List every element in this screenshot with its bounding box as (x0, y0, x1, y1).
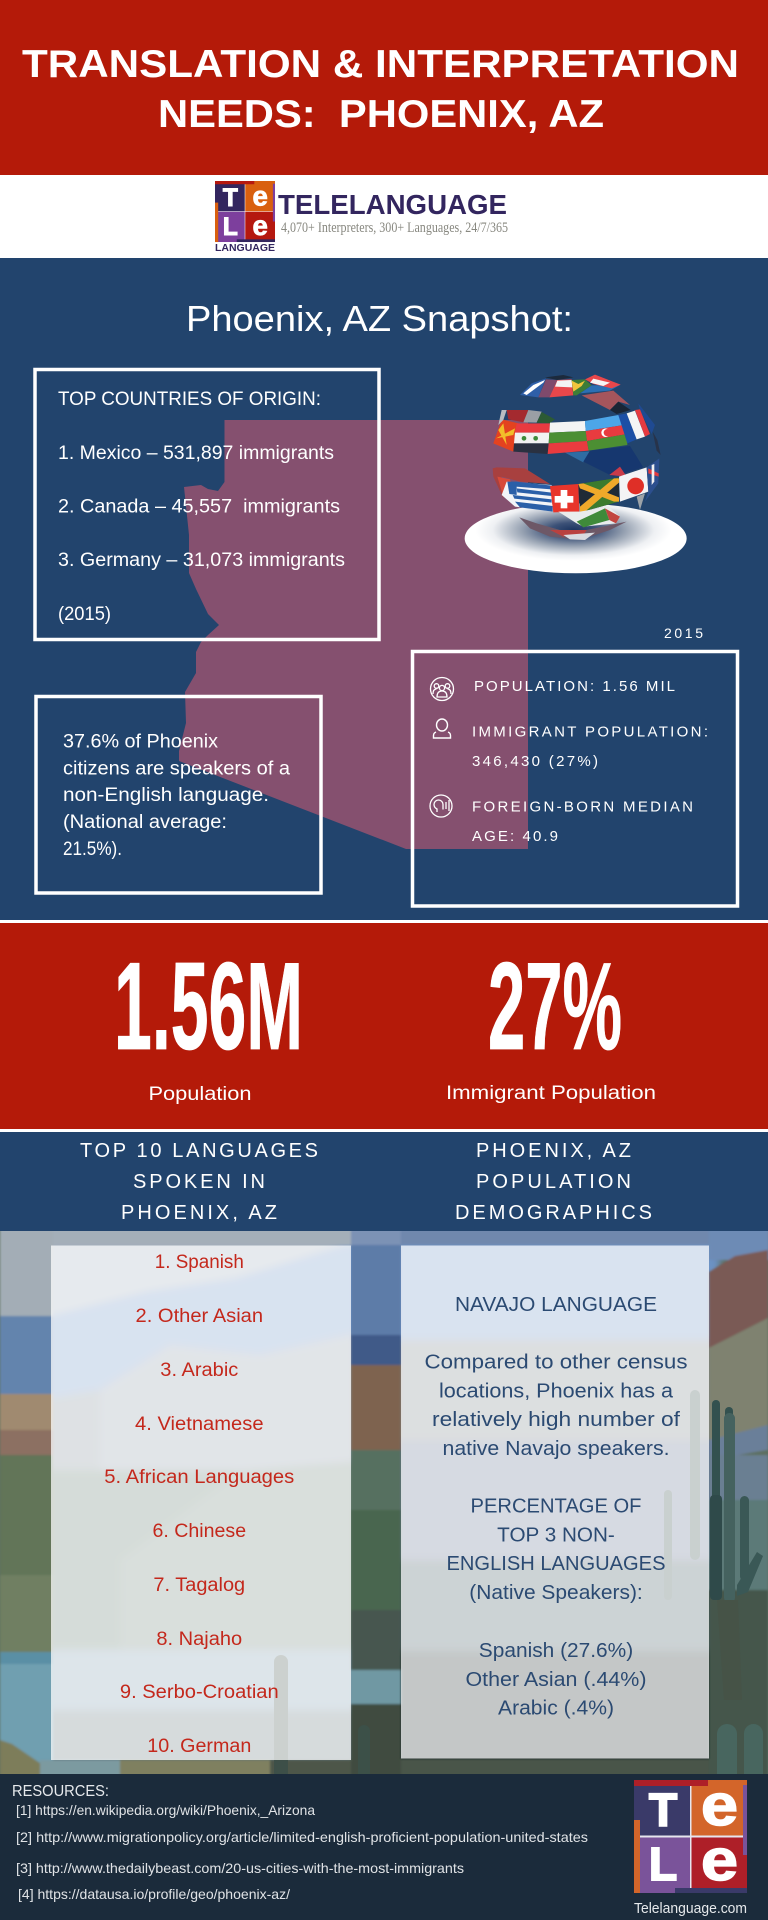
panel: top 10 languages list: 7. Tagalog (153, 1575, 245, 1596)
header band (0, 0, 768, 175)
panel: demographics text: native Navajo speakers. (442, 1438, 670, 1460)
heading: snapshot: Phoenix, AZ Snapshot: (186, 298, 573, 339)
icon: telelanguage logo large: T (649, 1784, 677, 1836)
stat: population (114, 938, 303, 1105)
panel: top countries: (2015) (58, 604, 111, 625)
panel: top countries (35, 370, 379, 640)
panel: top 10 languages list (51, 1246, 351, 1760)
icon: telelanguage logo large: L (649, 1838, 677, 1890)
panel: population stats: FOREIGN-BORN MEDIAN (472, 798, 693, 816)
panel: population stats: AGE: 40.9 (472, 828, 558, 845)
panel: non-english speakers (36, 696, 321, 893)
icon: telelanguage logo small (215, 180, 275, 242)
heading: demographics: POPULATION (476, 1171, 631, 1193)
panel: demographics text: TOP 3 NON- (497, 1524, 615, 1546)
right strip (709, 1231, 768, 1262)
map: arizona (179, 420, 528, 849)
panel: top 10 languages list: 5. African Languages (104, 1467, 294, 1488)
panel: top 10 languages list: 6. Chinese (152, 1521, 246, 1542)
under left panel (52, 1244, 351, 1316)
stat: immigrant population (446, 938, 656, 1104)
text: resource links: [2] http://www.migrationpolicy.org/article/limited-english-proficient-population-united-states (16, 1829, 588, 1845)
panel: top 10 languages list: 2. Other Asian (136, 1306, 263, 1327)
panel: non-english speakers: citizens are speakers of a (63, 758, 290, 780)
text: resource links: [1] https://en.wikipedia.org/wiki/Phoenix,_Arizona (16, 1802, 315, 1818)
heading: top 10 languages (80, 1140, 318, 1224)
panel: top 10 languages list: 3. Arabic (160, 1360, 238, 1381)
panel: non-english speakers: non-English language. (63, 785, 269, 806)
panel: top countries: 3. Germany – 31,073 immigrants (58, 550, 345, 571)
panel: big stats (0, 920, 768, 1132)
stat: population: 1.56M (114, 938, 303, 1076)
panel: top 10 languages list: 10. German (147, 1736, 251, 1757)
panel: snapshot (0, 258, 768, 920)
panel: top 10 languages list: 9. Serbo-Croatian (120, 1682, 279, 1703)
photo: desert mountains and lake background (0, 1220, 768, 1784)
gap strip (350, 1225, 402, 1245)
icon: telelanguage logo large: e (701, 1828, 738, 1893)
icon: telelanguage logo small: L (223, 214, 238, 241)
stat: immigrant population: Immigrant Population (446, 1083, 656, 1104)
icon: telelanguage logo small: e (252, 210, 268, 241)
icon: cacti (274, 1390, 763, 1784)
panel: demographics text (401, 1246, 709, 1758)
title (22, 43, 739, 136)
under right panel (400, 1244, 724, 1344)
panel: top countries: 2. Canada – 45,557 immigrants (58, 496, 340, 518)
logo tagline: 4,070+ Interpreters, 300+ Languages, 24/7/365 (281, 220, 508, 236)
text: resource links (16, 1802, 588, 1902)
title: NEEDS: PHOENIX, AZ (158, 93, 604, 136)
panel: top 10 languages list: 8. Najaho (156, 1629, 242, 1650)
icon: telelanguage logo large: e (701, 1773, 738, 1838)
panel: section headings (0, 1132, 768, 1231)
panel: population stats: IMMIGRANT POPULATION: (472, 724, 708, 740)
logo caption: LANGUAGE (215, 242, 275, 254)
panel: population stats: 346,430 (27%) (472, 753, 598, 770)
text: year: 2015 (664, 625, 703, 641)
logo wordmark: TELELANGUAGE (278, 189, 507, 220)
logo band (0, 175, 768, 258)
stat: population: Population (148, 1084, 252, 1105)
heading: demographics: DEMOGRAPHICS (455, 1202, 652, 1224)
panel: non-english speakers: 21.5%). (63, 839, 122, 860)
heading: top 10 languages: TOP 10 LANGUAGES (80, 1140, 318, 1162)
panel: top 10 languages list: 1. Spanish (155, 1252, 244, 1273)
text: resource links: [4] https://datausa.io/profile/geo/phoenix-az/ (18, 1886, 290, 1902)
panel: demographics text: locations, Phoenix has a (439, 1381, 674, 1403)
heading: resources: RESOURCES: (12, 1783, 109, 1800)
panel: demographics text: ENGLISH LANGUAGES (446, 1553, 666, 1575)
left strip (0, 1225, 53, 1316)
panel: demographics text: PERCENTAGE OF (470, 1496, 642, 1518)
heading: top 10 languages: PHOENIX, AZ (121, 1202, 277, 1224)
panel: demographics text: Compared to other census (424, 1352, 688, 1374)
text: resource links: [3] http://www.thedailybeast.com/20-us-cities-with-the-most-immigrants (16, 1860, 464, 1876)
panel: top countries: TOP COUNTRIES OF ORIGIN: (58, 389, 321, 410)
top strip above panels (332, 1231, 352, 1246)
panel: top countries: 1. Mexico – 531,897 immigrants (58, 443, 334, 464)
panel: demographics text: Other Asian (.44%) (466, 1669, 646, 1691)
panel: demographics text: (Native Speakers): (469, 1582, 643, 1604)
icon: flag globe (465, 375, 687, 573)
heading: demographics (455, 1140, 652, 1224)
icon: people in circle (430, 678, 454, 700)
heading: demographics: PHOENIX, AZ (476, 1140, 631, 1162)
icon: telelanguage logo small: T (223, 185, 238, 212)
panel: demographics text: Arabic (.4%) (498, 1698, 614, 1720)
stat: immigrant population: 27% (488, 938, 622, 1076)
icon: person (434, 719, 450, 738)
panel: footer resources (0, 1773, 768, 1920)
panel: non-english speakers: 37.6% of Phoenix (63, 732, 219, 752)
panel: non-english speakers: (National average: (63, 812, 227, 833)
icon: telelanguage logo large (634, 1773, 747, 1893)
icon: speaking head (430, 795, 452, 817)
heading: top 10 languages: SPOKEN IN (133, 1171, 265, 1193)
panel: demographics text: NAVAJO LANGUAGE (455, 1294, 657, 1316)
text: website: Telelanguage.com (634, 1900, 747, 1917)
panel: demographics text: relatively high number of (432, 1409, 681, 1431)
icon: telelanguage logo small: e (252, 180, 268, 211)
panel: demographics text: Spanish (27.6%) (479, 1640, 633, 1662)
panel: top 10 languages list: 4. Vietnamese (135, 1414, 264, 1435)
title: TRANSLATION & INTERPRETATION (22, 43, 739, 86)
panel: population stats: POPULATION: 1.56 MIL (474, 678, 675, 695)
panel: population stats (412, 652, 738, 906)
bottom strip below panels (38, 1760, 121, 1774)
